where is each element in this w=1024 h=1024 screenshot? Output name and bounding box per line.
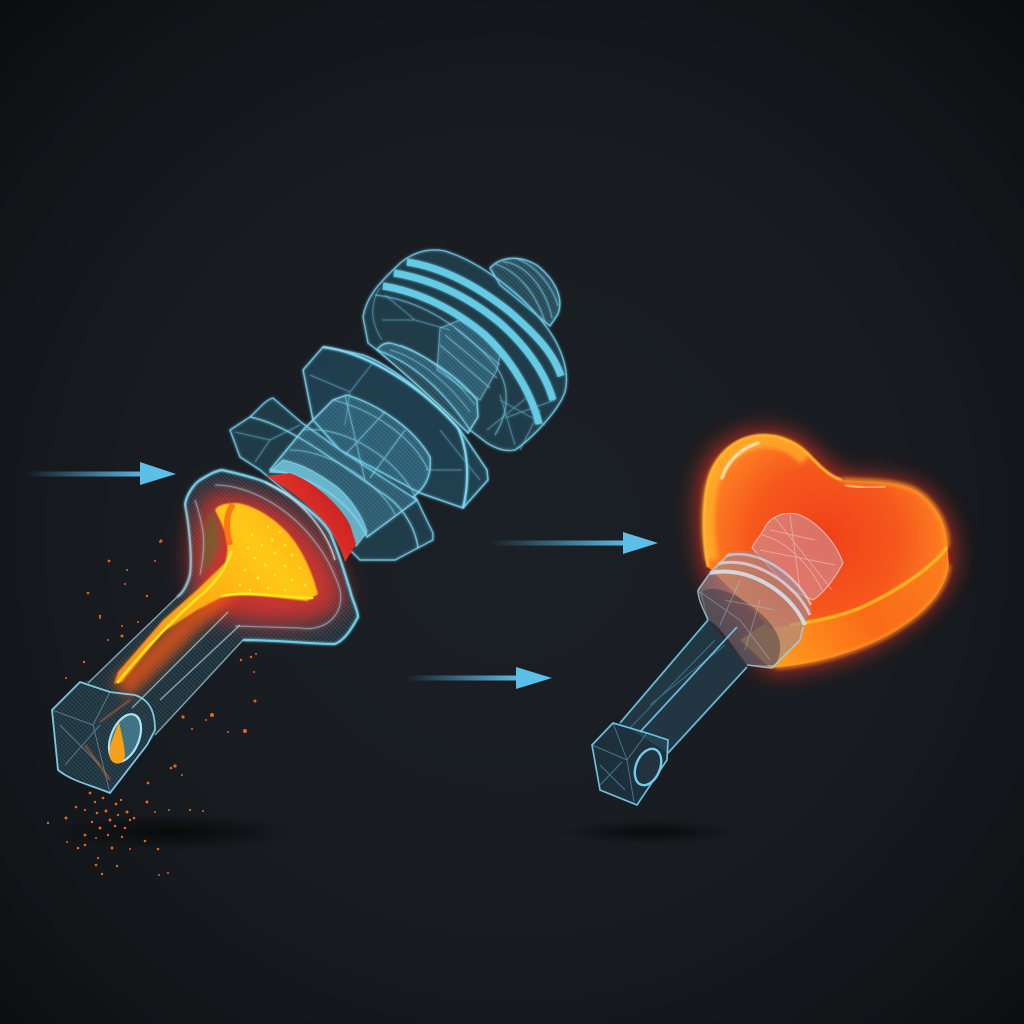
shaft (437, 318, 500, 400)
glowing heart (702, 435, 950, 668)
heart lower seam (790, 547, 947, 625)
rod shaft (620, 620, 747, 753)
disc upper (303, 347, 488, 508)
ground shadow: right part (560, 819, 740, 845)
heart highlight (722, 443, 758, 478)
dark green shade left of funnel (202, 510, 220, 572)
heart side wall (740, 540, 949, 668)
red glowing band (266, 473, 356, 562)
top flange (363, 250, 566, 451)
red heat glow (192, 492, 345, 625)
cooling stripes (383, 262, 561, 424)
piston threaded body (698, 551, 811, 668)
molten funnel (114, 503, 318, 684)
ground shadow: left part (50, 814, 300, 850)
heart inner yellow glow left (708, 442, 805, 560)
cap cylinder (752, 513, 843, 600)
top stub (490, 258, 560, 326)
rod big end (592, 723, 668, 805)
heart top face (704, 435, 947, 628)
heart outer red glow (702, 435, 950, 668)
heart rim right (842, 480, 947, 547)
wireframe crankshaft with molten core (47, 250, 566, 876)
rod heat glow (112, 578, 235, 698)
arrow: lower (405, 667, 552, 689)
small connecting rod (592, 513, 843, 805)
heart highlight right (845, 485, 885, 488)
heart yellow rim (704, 435, 842, 567)
ring mid lower cylinder (270, 395, 430, 537)
molten dots (239, 526, 306, 591)
orange edge in funnel (227, 504, 233, 545)
arrow: middle (490, 532, 658, 554)
rod wire outline (88, 597, 243, 735)
sparks (47, 540, 257, 876)
molten bright streak (118, 552, 312, 682)
heart bottom rim (775, 565, 949, 667)
head and rod body (52, 470, 358, 793)
big end (52, 682, 155, 793)
arrow: top left (25, 462, 176, 485)
cyan neck band (270, 460, 367, 546)
disc lower (230, 398, 433, 560)
crank wire assembly (230, 250, 566, 560)
head wire outline (177, 470, 358, 644)
ring mid upper (377, 343, 478, 433)
